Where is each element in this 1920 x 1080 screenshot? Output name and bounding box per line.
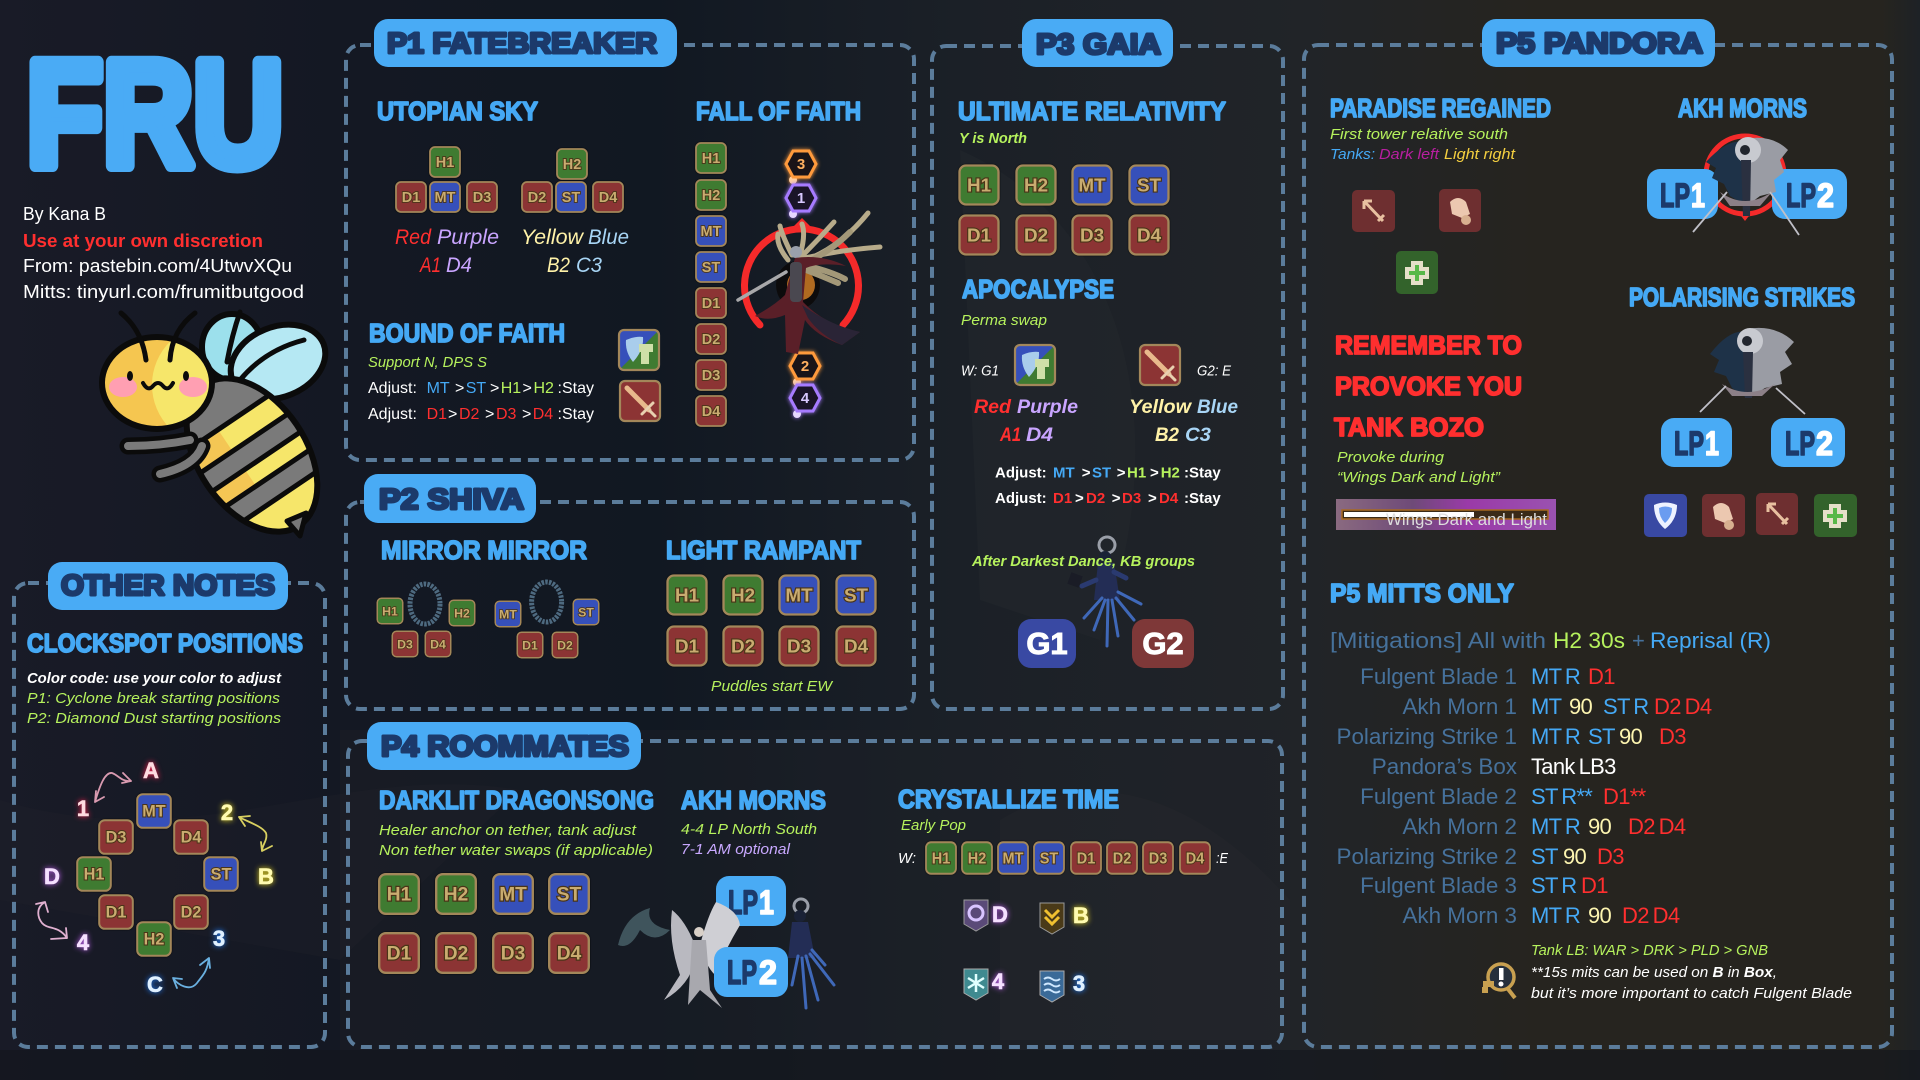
- heading: crystallize time: CRYSTALLIZE TIME: [898, 784, 1119, 814]
- mitigation table: D1**: [1603, 784, 1647, 809]
- boss: Pandora akh morn diagram: LP: [1660, 177, 1690, 215]
- heading: P4 Roommates: P4 ROOMMATES: [381, 731, 629, 763]
- text: color code notes: Color code: use your color to adjust: [27, 671, 282, 687]
- text: dragonsong notes: [379, 823, 653, 859]
- credits text block: Use at your own discretion: [23, 231, 263, 251]
- credits text block: By Kana B: [23, 204, 106, 224]
- text: adjust priority lines: >: [1150, 464, 1159, 482]
- mitigation table: D2 D4: [1628, 814, 1686, 839]
- heading: P2 Shiva: P2 SHIVA: [379, 484, 524, 516]
- debuff icons with waymarks: 4: [992, 969, 1005, 994]
- mitigation table: 90: [1588, 903, 1612, 928]
- boss: Gaia figure: [1067, 537, 1141, 646]
- crystallize role line: H2: [968, 851, 986, 867]
- crystallize role line: :E: [1216, 851, 1228, 867]
- text: adjust priority lines: Adjust:: [995, 490, 1047, 507]
- relativity role tiles: D3: [1080, 225, 1104, 245]
- label: LP1: 1: [1705, 425, 1719, 463]
- label: LP2: 2: [759, 954, 777, 992]
- mirror mirror diagram: H1: [382, 604, 398, 618]
- hex markers: 4: [801, 390, 810, 407]
- label: G1: [1018, 619, 1076, 668]
- dragonsong role tiles: [379, 874, 589, 973]
- mitigation table: D2 D4: [1622, 903, 1680, 928]
- icon: magnifier with heal cross: [1482, 964, 1515, 998]
- mitigation table: D3: [1597, 844, 1624, 869]
- mitigation table: 90: [1588, 814, 1612, 839]
- label: LP1: 1: [759, 884, 774, 922]
- text: adjust priority lines: >: [1075, 490, 1084, 507]
- relativity role tiles: ST: [1137, 175, 1162, 195]
- fall of faith role column: [696, 143, 726, 426]
- mitigation table: Akh Morn 1: [1402, 694, 1517, 719]
- text: adjust priority lines: H1: [501, 380, 521, 397]
- text: puddles note: Puddles start EW: [711, 679, 833, 695]
- label: G2: G2: [1142, 626, 1184, 661]
- utopian sky role tiles: MT: [435, 190, 456, 206]
- text: adjust priority lines: :Stay: [1184, 490, 1221, 507]
- waymarkers: 4: [77, 930, 90, 955]
- mitigation table: MT: [1531, 694, 1562, 719]
- waymarkers: 3: [213, 926, 225, 951]
- utopian sky colour assignments: Red: [395, 226, 432, 249]
- text: akh morn notes: 7-1 AM optional: [681, 842, 791, 858]
- text: adjust priority lines: >: [448, 406, 457, 423]
- text: adjust priority lines: MT: [427, 380, 450, 397]
- text: paradise notes: [1330, 127, 1516, 163]
- mitigation table: Polarizing Strike 1: [1337, 724, 1517, 749]
- text: paradise notes: Light right: [1444, 147, 1516, 163]
- boss: Fatebreaker with red ring: [738, 213, 880, 354]
- text: limit break and 15s mit notes: **15s mits can be used on B in Box,: [1531, 965, 1777, 981]
- dragonsong role tiles: D3: [501, 944, 525, 965]
- text: adjust priority lines: Adjust:: [368, 406, 417, 423]
- hex markers: 2: [801, 358, 809, 375]
- crystallize role line: MT: [1003, 851, 1023, 867]
- mitigation table: D1: [1588, 664, 1615, 689]
- dragonsong role tiles: MT: [499, 885, 527, 906]
- dragonsong role tiles: D4: [557, 944, 582, 965]
- heading: other notes: OTHER NOTES: [61, 570, 275, 602]
- mitigation table: 90: [1569, 694, 1593, 719]
- label: LP2: [714, 947, 788, 997]
- heading: clockspot positions: CLOCKSPOT POSITIONS: [27, 628, 303, 658]
- mitigation table: Fulgent Blade 1: [1360, 664, 1517, 689]
- mitigation table: Akh Morn 2: [1402, 814, 1517, 839]
- boss: Pandora akh morn diagram: [1647, 136, 1847, 235]
- text: adjust priority lines: >: [1148, 490, 1157, 507]
- cast bar: wings dark and light: [1336, 499, 1556, 530]
- text: limit break and 15s mit notes: but it’s more important to catch Fulgent Blade: [1531, 986, 1852, 1002]
- waymarkers: C: [147, 972, 163, 997]
- dragonsong role tiles: D2: [444, 944, 468, 965]
- mirror mirror diagram: MT: [499, 607, 517, 621]
- dragonsong role tiles: H1: [387, 885, 412, 906]
- heading: paradise regained: PARADISE REGAINED: [1330, 93, 1551, 123]
- relativity role tiles: D1: [967, 225, 991, 245]
- light rampant role tiles: ST: [844, 585, 869, 605]
- text: mitigations summary: Reprisal (R): [1650, 628, 1771, 653]
- text: color code notes: P1: Cyclone break starting positions: [27, 691, 280, 707]
- text: limit break and 15s mit notes: Tank LB: WAR > DRK > PLD > GNB: [1531, 943, 1768, 959]
- fall of faith role column: D2: [702, 332, 720, 348]
- mitigation table: ST R: [1531, 873, 1576, 898]
- apocalypse colour assignments: [974, 397, 1238, 446]
- clockspot role tiles: ST: [211, 866, 231, 884]
- dragonsong role tiles: ST: [557, 885, 582, 906]
- text: provoke note: [1337, 450, 1501, 486]
- heading: polarising strikes: POLARISING STRIKES: [1629, 282, 1855, 312]
- mitigation table: MT R: [1531, 664, 1580, 689]
- text: akh morn notes: [681, 822, 817, 858]
- utopian sky role tiles: [396, 147, 623, 212]
- text: adjust priority lines: :Stay: [558, 380, 594, 397]
- clockspot role tiles: D3: [106, 829, 126, 847]
- text: adjust priority lines: :Stay: [558, 406, 594, 423]
- hex markers: 3: [797, 156, 805, 173]
- waymarkers: A: [143, 758, 159, 783]
- apocalypse colour assignments: Red: [974, 397, 1011, 418]
- heading: P1 Fatebreaker: P1 FATEBREAKER: [387, 28, 657, 60]
- utopian sky colour assignments: C3: [576, 254, 602, 277]
- mitigation table: ST: [1588, 724, 1615, 749]
- clockspot role tiles: H1: [84, 866, 104, 884]
- apocalypse colour assignments: Yellow: [1129, 397, 1192, 418]
- text: adjust priority lines: MT: [1053, 464, 1075, 482]
- text: mitigations summary: +: [1632, 628, 1645, 653]
- utopian sky role tiles: D4: [599, 190, 617, 206]
- text: adjust priority lines: D4: [533, 406, 553, 423]
- boss: angel and dragon: [618, 902, 740, 1008]
- icon: dps role: [620, 381, 660, 421]
- icon: bee mascot: [99, 310, 328, 538]
- crystallize role line: [898, 842, 1228, 874]
- text: paradise notes: Tanks:: [1330, 147, 1375, 163]
- hex markers: 1: [797, 190, 805, 207]
- light rampant role tiles: D4: [844, 636, 869, 656]
- text: provoke note: Provoke during: [1337, 450, 1444, 466]
- text: adjust priority lines: :Stay: [1184, 464, 1221, 482]
- text: dragonsong notes: Non tether water swaps (if applicable): [379, 843, 653, 859]
- crystallize role line: W:: [898, 851, 916, 867]
- heading: akh morns: AKH MORNS: [681, 785, 826, 815]
- utopian sky colour assignments: A1: [418, 254, 441, 277]
- text: limit break and 15s mit notes: [1531, 943, 1852, 1002]
- utopian sky role tiles: H2: [563, 157, 581, 173]
- apocalypse colour assignments: A1: [999, 425, 1021, 446]
- text: color code notes: P2: Diamond Dust starting positions: [27, 711, 281, 727]
- icon: ranged job: [1352, 190, 1395, 232]
- text: mitigations summary: [1330, 628, 1771, 653]
- fall of faith role column: D3: [702, 368, 720, 384]
- heading: darklit dragonsong: DARKLIT DRAGONSONG: [379, 785, 654, 815]
- heading: utopian sky: UTOPIAN SKY: [377, 96, 538, 126]
- text: dragonsong notes: Healer anchor on tether, tank adjust: [379, 823, 637, 839]
- icon: melee job: [1702, 494, 1745, 537]
- label: LP1: LP: [1674, 425, 1704, 463]
- text: adjust priority lines: >: [455, 380, 464, 397]
- mirror mirror diagram: ST: [578, 605, 594, 619]
- text: adjust priority lines: D1: [1053, 490, 1072, 507]
- icon: tank job: [1644, 494, 1687, 537]
- text: adjust priority lines: H2: [1161, 464, 1180, 482]
- label: G1: G1: [1026, 626, 1068, 661]
- light rampant role tiles: D1: [675, 636, 699, 656]
- panel: P5 Pandora: [1304, 19, 1892, 1047]
- mitigation table: D3: [1659, 724, 1686, 749]
- utopian sky colour assignments: D4: [446, 254, 472, 277]
- icon: melee job: [1439, 189, 1481, 232]
- mitigation table: Pandora’s Box: [1372, 754, 1517, 779]
- panel: other notes: [14, 562, 325, 1047]
- fall of faith role column: H1: [702, 151, 720, 167]
- panel: P1 Fatebreaker: [346, 19, 914, 460]
- utopian sky role tiles: ST: [562, 190, 580, 206]
- mirror mirror diagram: H2: [454, 606, 470, 620]
- credits text block: [23, 204, 304, 302]
- text: perma swap: Perma swap: [961, 313, 1047, 329]
- text: adjust priority lines: Adjust:: [368, 380, 417, 397]
- mitigation table: ST: [1531, 844, 1558, 869]
- mitigation table: 90: [1619, 724, 1643, 749]
- waymarkers: D: [44, 864, 60, 889]
- heading: apocalypse: APOCALYPSE: [962, 274, 1114, 304]
- text: adjust priority lines: >: [522, 406, 531, 423]
- relativity role tiles: MT: [1078, 175, 1106, 195]
- text: adjust priority lines: >: [522, 380, 532, 397]
- icon: healer job: [1396, 251, 1438, 294]
- label: LP1: LP: [728, 884, 758, 922]
- heading: akh morns: AKH MORNS: [1678, 93, 1807, 123]
- utopian sky role tiles: D1: [402, 190, 420, 206]
- light rampant role tiles: MT: [785, 585, 813, 605]
- light rampant role tiles: H2: [731, 585, 755, 605]
- light rampant role tiles: H1: [675, 585, 699, 605]
- mitigation table: Akh Morn 3: [1402, 903, 1517, 928]
- waymarkers: B: [258, 864, 274, 889]
- text: mitigations summary: H2 30s: [1553, 628, 1625, 653]
- text: Y is north: Y is North: [959, 131, 1027, 147]
- relativity role tiles: H1: [967, 175, 991, 195]
- hex markers: [786, 151, 820, 418]
- utopian sky role tiles: D2: [528, 190, 546, 206]
- fall of faith role column: D1: [702, 296, 720, 312]
- light rampant role tiles: [668, 576, 876, 666]
- debuff icons with waymarks: 3: [1073, 971, 1085, 996]
- heading: ultimate relativity: ULTIMATE RELATIVITY: [958, 96, 1226, 126]
- heading: P3 Gaia: P3 GAIA: [1036, 29, 1161, 61]
- dragonsong role tiles: H2: [444, 885, 468, 906]
- text: adjust priority lines: H1: [1127, 464, 1146, 482]
- mitigation table: D2 D4: [1654, 694, 1712, 719]
- heading: mirror mirror: MIRROR MIRROR: [381, 535, 587, 565]
- boss: Gaia figure: [788, 899, 834, 1008]
- heading: fall of faith: FALL OF FAITH: [696, 96, 861, 126]
- boss: Pandora figure: [1700, 328, 1805, 414]
- apocalypse colour assignments: Purple: [1017, 397, 1078, 418]
- apocalypse colour assignments: C3: [1185, 425, 1211, 446]
- crystallize role line: D3: [1149, 851, 1167, 867]
- utopian sky role tiles: D3: [473, 190, 491, 206]
- heading: P5 Pandora: P5 PANDORA: [1496, 28, 1703, 60]
- fall of faith role column: H2: [702, 188, 720, 204]
- callout: remember to provoke: TANK BOZO: [1334, 412, 1484, 442]
- text: provoke note: “Wings Dark and Light”: [1337, 470, 1501, 486]
- relativity role tiles: H2: [1024, 175, 1048, 195]
- mitigation table: Polarizing Strike 2: [1337, 844, 1517, 869]
- heading: P5 mitts only: P5 MITTS ONLY: [1330, 578, 1514, 608]
- mitigation table: Tank LB3: [1531, 754, 1616, 779]
- text: adjust priority lines: D3: [1122, 490, 1141, 507]
- text: support north dps south: Support N, DPS S: [368, 355, 487, 371]
- waymarkers: [44, 758, 274, 997]
- crystallize role line: ST: [1040, 851, 1058, 867]
- mitigation table: 90: [1563, 844, 1587, 869]
- boss: Pandora akh morn diagram: LP: [1786, 177, 1816, 215]
- icon: ranged job: [1756, 493, 1798, 535]
- fall of faith role column: ST: [702, 260, 720, 276]
- utopian sky colour assignments: [395, 226, 629, 277]
- relativity role tiles: D2: [1024, 225, 1048, 245]
- relativity role tiles: [960, 166, 1168, 254]
- light rampant role tiles: D2: [731, 636, 755, 656]
- clockspot role tiles: D1: [106, 904, 126, 922]
- label: LP2: LP: [1785, 425, 1815, 463]
- cast bar: wings dark and light: Wings Dark and Light: [1386, 510, 1547, 529]
- clockspot role tiles: D4: [181, 829, 201, 847]
- mirror mirror diagram: D3: [397, 637, 413, 651]
- text: after darkest dance: After Darkest Dance, KB groups: [971, 554, 1195, 570]
- text: adjust priority lines: D3: [496, 406, 517, 423]
- icon: healer job: [1814, 494, 1857, 537]
- fall of faith role column: D4: [702, 404, 720, 420]
- clockspot role tiles: H2: [144, 931, 164, 949]
- apocalypse colour assignments: Blue: [1197, 397, 1238, 418]
- text: adjust priority lines: D1: [427, 406, 447, 423]
- apocalypse colour assignments: B2: [1155, 425, 1179, 446]
- text: akh morn notes: 4-4 LP North South: [681, 822, 817, 838]
- credits text block: From: pastebin.com/4UtwvXQu: [23, 256, 292, 276]
- mitigation table: MT R: [1531, 724, 1580, 749]
- text: adjust priority lines: >: [490, 380, 499, 397]
- debuff icons with waymarks: B: [1073, 903, 1089, 928]
- text: adjust priority lines: D2: [1086, 490, 1105, 507]
- text: adjust priority lines: Adjust:: [995, 464, 1047, 482]
- text: adjust priority lines: [368, 380, 594, 423]
- mirror mirror diagram: [377, 582, 599, 658]
- credits text block: Mitts: tinyurl.com/frumitbutgood: [23, 282, 304, 302]
- arrows between waymarkers: [36, 773, 272, 988]
- text: adjust priority lines: D4: [1159, 490, 1179, 507]
- mirror mirror diagram: D1: [522, 638, 538, 652]
- label: G2: [1132, 619, 1194, 668]
- utopian sky role tiles: H1: [436, 155, 454, 171]
- utopian sky colour assignments: Purple: [437, 226, 499, 249]
- text: paradise notes: Dark left: [1379, 147, 1440, 163]
- text: adjust priority lines: D2: [459, 406, 480, 423]
- label: LP1: [716, 876, 786, 926]
- text: adjust priority lines: [995, 464, 1221, 507]
- dragonsong role tiles: D1: [387, 944, 412, 965]
- clockspot role tiles: D2: [181, 904, 201, 922]
- panel: P4 Roommates: [348, 722, 1282, 1047]
- mitigation table: [1337, 664, 1712, 928]
- crystallize role line: D1: [1077, 851, 1095, 867]
- icon: support role: [1015, 345, 1055, 385]
- text: paradise notes: First tower relative south: [1330, 127, 1508, 143]
- text: west group one: W: G1: [961, 364, 999, 380]
- icon: dps role: [1140, 345, 1180, 385]
- mitigation table: ST R: [1603, 694, 1648, 719]
- text: adjust priority lines: >: [1112, 490, 1121, 507]
- panel: P2 Shiva: [346, 474, 914, 709]
- text: adjust priority lines: >: [1117, 464, 1126, 482]
- relativity role tiles: D4: [1137, 225, 1162, 245]
- crystallize role line: D4: [1186, 851, 1205, 867]
- label: LP2: 2: [1816, 425, 1833, 463]
- text: adjust priority lines: ST: [1092, 464, 1111, 482]
- utopian sky colour assignments: Blue: [588, 226, 629, 249]
- title: FRU: [26, 30, 284, 198]
- text: adjust priority lines: H2: [534, 380, 554, 397]
- waymarkers: 2: [221, 800, 233, 825]
- text: color code notes: [27, 671, 282, 727]
- text: east group two: G2: E: [1197, 364, 1231, 380]
- text: mitigations summary: [Mitigations] All with: [1330, 628, 1546, 653]
- label: LP2: [1771, 418, 1845, 467]
- fall of faith role column: MT: [701, 224, 722, 240]
- label: LP1: [1661, 418, 1732, 467]
- utopian sky colour assignments: B2: [547, 254, 570, 277]
- text: early pop: Early Pop: [901, 818, 966, 834]
- crystallize role line: D2: [1113, 851, 1131, 867]
- mitigation table: Fulgent Blade 3: [1360, 873, 1517, 898]
- text: adjust priority lines: ST: [466, 380, 486, 397]
- mitigation table: MT R: [1531, 814, 1580, 839]
- clockspot role tiles: MT: [142, 803, 166, 821]
- mitigation table: Fulgent Blade 2: [1360, 784, 1517, 809]
- apocalypse colour assignments: D4: [1026, 425, 1053, 446]
- callout: remember to provoke: REMEMBER TO: [1335, 330, 1522, 360]
- icon: support role: [619, 330, 659, 370]
- waymarkers: 1: [77, 796, 89, 821]
- mitigation table: MT R: [1531, 903, 1580, 928]
- mitigation table: ST R**: [1531, 784, 1593, 809]
- callout: remember to provoke: PROVOKE YOU: [1335, 371, 1522, 401]
- light rampant role tiles: D3: [787, 636, 811, 656]
- debuff icons with waymarks: D: [992, 902, 1008, 927]
- boss: Pandora akh morn diagram: 2: [1817, 177, 1834, 215]
- text: adjust priority lines: >: [485, 406, 494, 423]
- heading: bound of faith: BOUND OF FAITH: [369, 318, 565, 348]
- panel: P3 Gaia: [932, 19, 1283, 709]
- text: adjust priority lines: >: [1082, 464, 1091, 482]
- crystallize role line: H1: [932, 851, 950, 867]
- mirror mirror diagram: D4: [430, 637, 446, 651]
- callout: remember to provoke: [1334, 330, 1522, 442]
- utopian sky colour assignments: Yellow: [521, 226, 585, 249]
- debuff icons with waymarks: [964, 900, 1089, 1002]
- label: LP2: LP: [727, 954, 757, 992]
- clockspot role tiles: [77, 794, 238, 956]
- mitigation table: D1: [1581, 873, 1608, 898]
- heading: light rampant: LIGHT RAMPANT: [666, 535, 861, 565]
- boss: Pandora akh morn diagram: 1: [1691, 177, 1705, 215]
- mirror mirror diagram: D2: [557, 638, 573, 652]
